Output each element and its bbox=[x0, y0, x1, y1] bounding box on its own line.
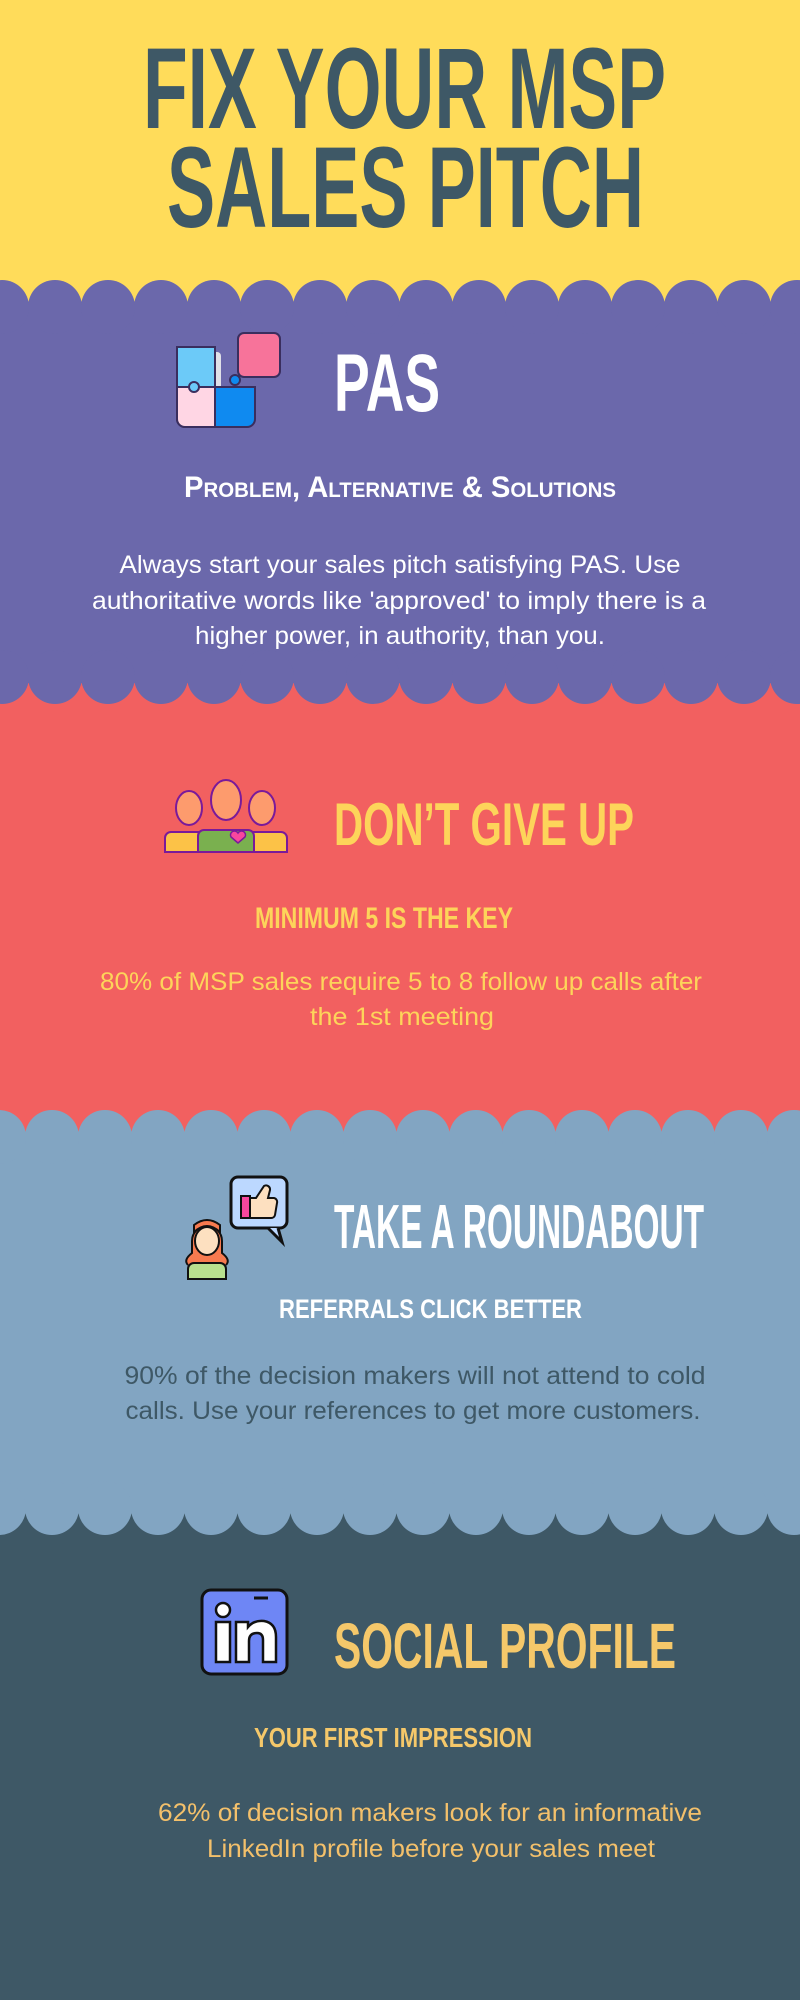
subheading: referrals: REFERRALS CLICK BETTER bbox=[279, 1294, 582, 1324]
text: follow up body bbox=[100, 968, 702, 1031]
panel: PAS background bbox=[0, 280, 800, 683]
icon: woman with thumbs up bbox=[186, 1177, 287, 1279]
text: PAS body bbox=[92, 551, 706, 650]
text: PAS body: higher power, in authority, than you. bbox=[195, 622, 605, 650]
text: social body: 62% of decision makers look for an informative bbox=[158, 1799, 702, 1827]
panel: dont give up background bbox=[0, 650, 800, 1135]
subheading: first impression: YOUR FIRST IMPRESSION bbox=[254, 1722, 532, 1753]
subheading: PAS: Problem, Alternative & Solutions bbox=[184, 471, 616, 504]
subheading: minimum 5: MINIMUM 5 IS THE KEY bbox=[255, 902, 513, 935]
icon: puzzle bbox=[177, 333, 280, 428]
text: follow up body: 80% of MSP sales require 5 to 8 follow up calls after bbox=[100, 968, 702, 996]
title bbox=[143, 25, 666, 252]
text: referrals body: calls. Use your references to get more customers. bbox=[126, 1397, 700, 1425]
text: PAS body: Always start your sales pitch satisfying PAS. Use bbox=[120, 551, 680, 579]
panel: roundabout background bbox=[0, 1110, 800, 1513]
text: PAS body: authoritative words like 'approved' to imply there is a bbox=[92, 587, 706, 615]
text: follow up body: the 1st meeting bbox=[310, 1003, 494, 1031]
icon: people bbox=[165, 780, 287, 852]
heading: dont give up: DON’T GIVE UP bbox=[334, 791, 634, 858]
panel: social background bbox=[0, 1481, 800, 2000]
heading: PAS: PAS bbox=[334, 338, 440, 429]
header background bbox=[0, 0, 800, 310]
icon: linkedin bbox=[202, 1590, 287, 1674]
text: referrals body: 90% of the decision makers will not attend to cold bbox=[124, 1362, 705, 1390]
text: social body bbox=[158, 1799, 702, 1863]
text: referrals body bbox=[124, 1362, 705, 1425]
text: social body: LinkedIn profile before your sales meet bbox=[207, 1835, 655, 1863]
